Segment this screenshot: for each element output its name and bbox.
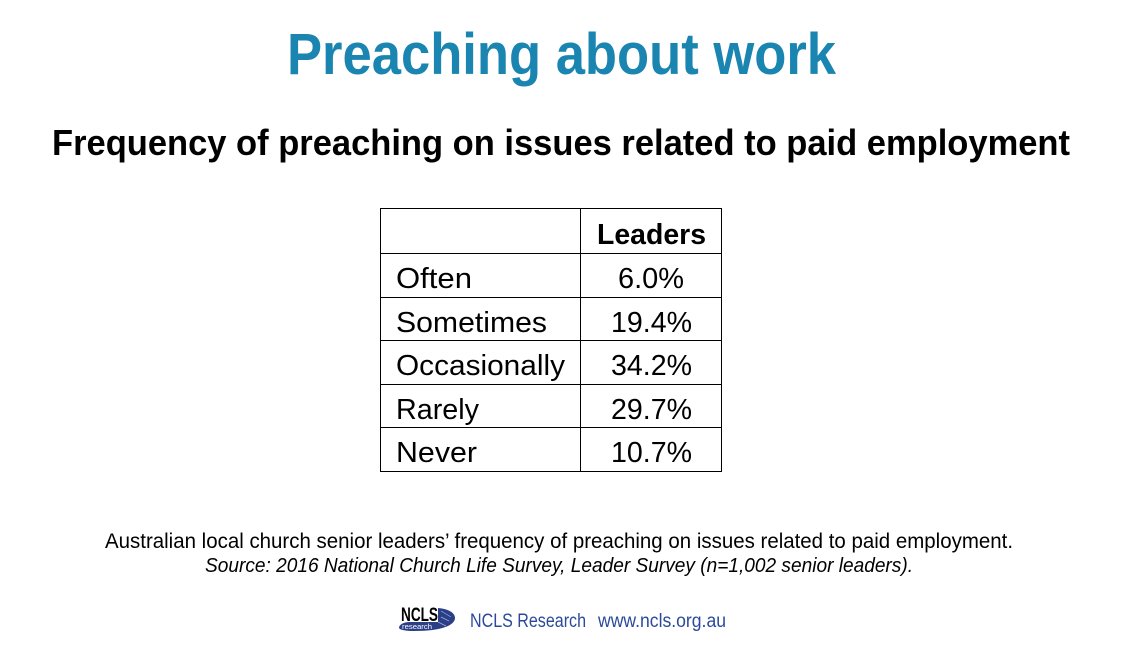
row: Occasionally <box>396 350 692 382</box>
row: Never: Never <box>396 437 477 469</box>
table: leaders frequency <box>380 208 722 472</box>
title: Preaching about work <box>287 22 837 87</box>
row: Never <box>396 437 692 469</box>
column header: Leaders: Leaders <box>597 219 706 251</box>
row: Often: Often <box>396 263 472 295</box>
subtitle: Frequency of preaching on issues related to paid employment <box>52 122 1070 163</box>
footer: organisation name and website: NCLS Research <box>470 611 586 632</box>
row: Sometimes <box>396 307 692 339</box>
row: Never: 10.7% <box>611 437 692 469</box>
row: Occasionally: 34.2% <box>611 350 692 382</box>
row: Sometimes: 19.4% <box>611 307 692 339</box>
row: Often <box>396 263 684 295</box>
row: Sometimes: Sometimes <box>396 307 547 339</box>
footer: organisation name and website <box>470 611 726 632</box>
row: Often: 6.0% <box>618 263 684 295</box>
caption: Australian local church senior leaders’ frequency of preaching on issues related to paid employment. <box>105 530 1013 553</box>
icon: NCLS logo: NCLS <box>401 605 438 626</box>
row: Occasionally: Occasionally <box>396 350 566 382</box>
row: Rarely <box>396 394 692 426</box>
row: Rarely: Rarely <box>396 394 479 426</box>
footer: organisation name and website: www.ncls.org.au <box>597 611 726 632</box>
row: Rarely: 29.7% <box>611 394 692 426</box>
source note: Source: 2016 National Church Life Survey, Leader Survey (n=1,002 senior leaders). <box>205 555 913 577</box>
icon: NCLS logo: research <box>402 624 432 631</box>
